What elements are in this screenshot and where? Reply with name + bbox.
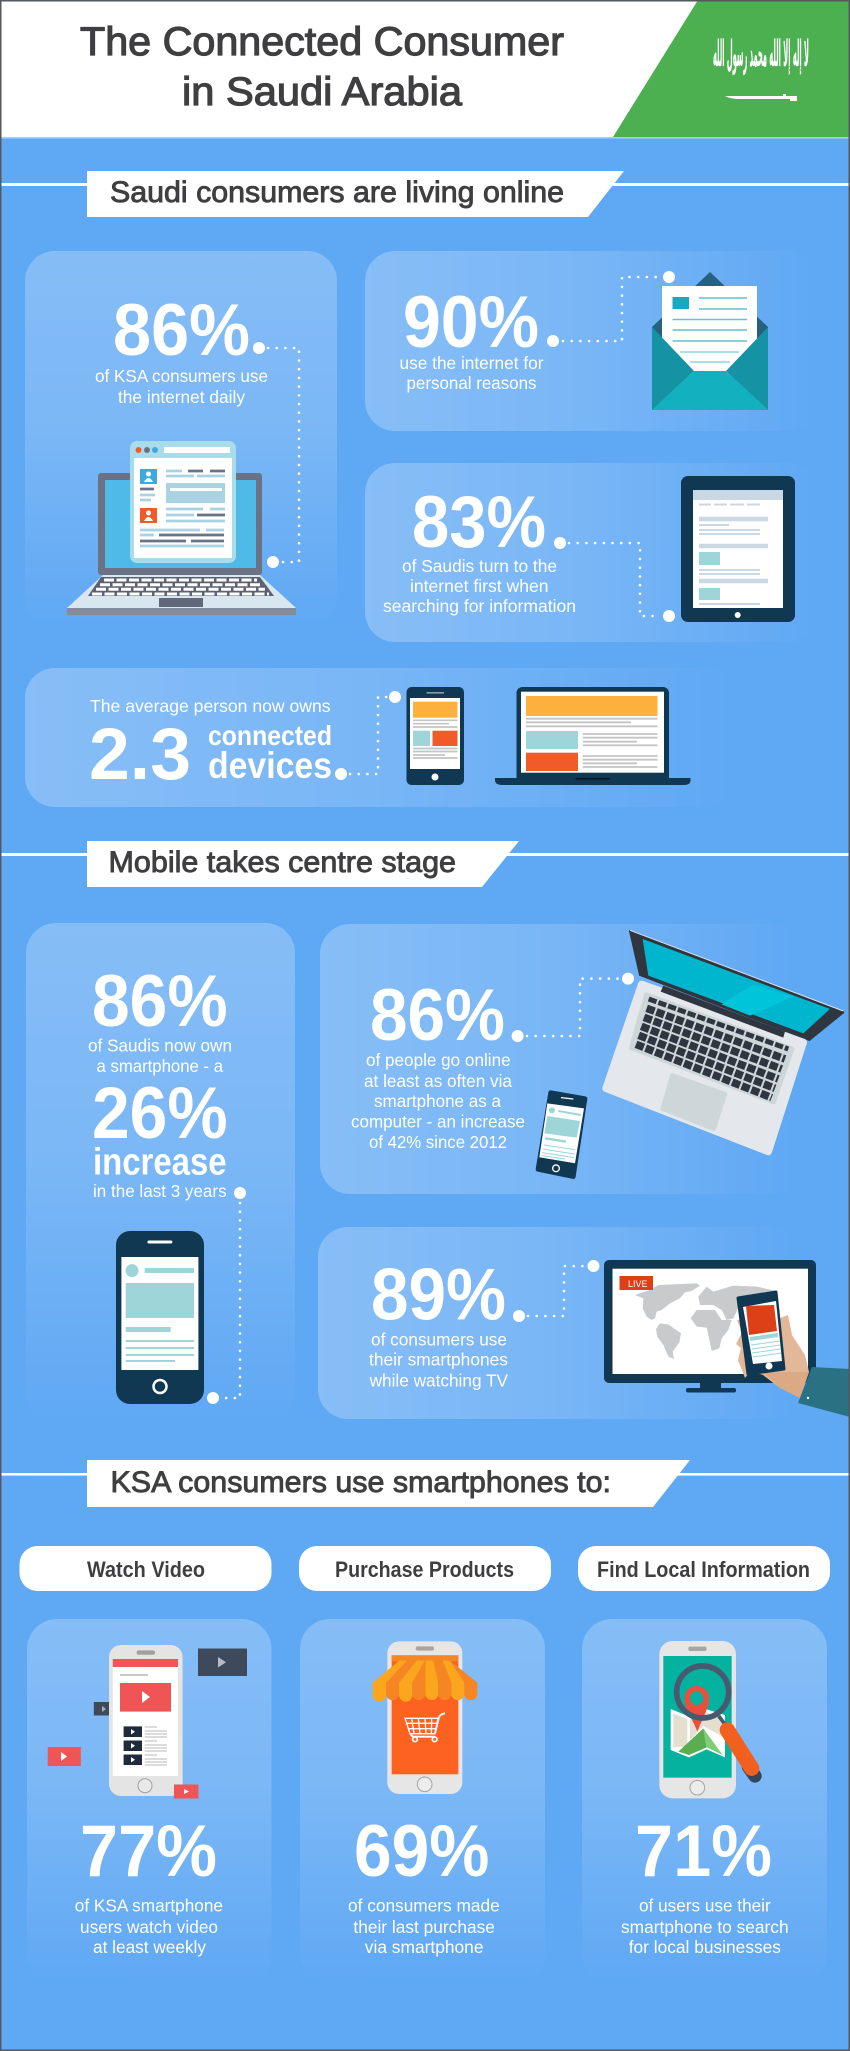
- connector: [207, 1187, 246, 1404]
- caption: for local businesses: [629, 1937, 781, 1957]
- caption: users watch video: [80, 1917, 218, 1937]
- increase label: increase: [93, 1142, 227, 1184]
- stat 89%: 89%: [371, 1255, 506, 1336]
- pill: Find Local Information: Find Local Information: [597, 1557, 810, 1582]
- stat 86%: 86%: [370, 975, 505, 1056]
- caption: of Saudis now own: [88, 1036, 232, 1056]
- stat caption: [95, 366, 268, 407]
- icon: envelope: [652, 272, 768, 410]
- panel: smartphone ownership: [26, 923, 295, 1426]
- icon: TV with world map: [604, 1260, 816, 1392]
- caption: of consumers use: [371, 1330, 507, 1350]
- pill: Watch Video: [20, 1546, 272, 1591]
- caption: [88, 1036, 232, 1076]
- caption: while watching TV: [369, 1370, 508, 1390]
- stat 26%: 26%: [92, 1073, 228, 1154]
- icon: phone playing video: [48, 1645, 247, 1798]
- caption: their smartphones: [369, 1350, 508, 1370]
- section heading ribbon: Mobile takes centre stage: [108, 846, 456, 879]
- section 1: Saudi consumers are living online: [0, 171, 850, 807]
- connector: [513, 1260, 600, 1322]
- icon: smartphone: [116, 1231, 204, 1404]
- stat caption: internet first when: [410, 576, 548, 596]
- caption: [621, 1896, 789, 1957]
- stat 83%: 83%: [412, 482, 546, 563]
- caption: smartphone to search: [621, 1917, 789, 1937]
- section heading ribbon: [87, 1460, 690, 1507]
- stat caption: use the internet for: [400, 353, 544, 373]
- section 2: Mobile takes centre stage: [0, 841, 850, 1426]
- panel: 90% personal reasons: [365, 251, 820, 431]
- panel: find local information: [582, 1619, 827, 1985]
- header banner: [0, 0, 850, 138]
- stat caption: of Saudis turn to the: [402, 556, 557, 576]
- caption: smartphone as a: [374, 1091, 501, 1111]
- icon: phone with shop awning: [373, 1641, 477, 1794]
- caption: of people go online: [366, 1050, 511, 1070]
- icon: open laptop: [606, 930, 843, 1152]
- caption: [348, 1896, 500, 1957]
- icon: tablet: [681, 476, 795, 622]
- connector: [554, 537, 675, 622]
- caption: [351, 1050, 525, 1152]
- caption: of KSA smartphone: [75, 1896, 223, 1916]
- panel: watch video: [27, 1619, 272, 1985]
- connector: [335, 691, 401, 780]
- caption: computer - an increase: [351, 1112, 525, 1132]
- pill: Find Local Information: [578, 1546, 830, 1591]
- panel: 2.3 connected devices: [25, 668, 740, 807]
- connector: [512, 973, 634, 1042]
- connector: [547, 271, 675, 347]
- section heading ribbon: Saudi consumers are living online: [110, 176, 564, 209]
- stat 77%: 77%: [80, 1811, 217, 1892]
- title: The Connected Consumer: [80, 20, 564, 64]
- caption: their last purchase: [353, 1917, 495, 1937]
- caption: at least weekly: [93, 1937, 206, 1957]
- section heading ribbon: KSA consumers use smartphones to:: [110, 1466, 611, 1499]
- flag of Saudi Arabia: [613, 0, 850, 137]
- icon: hand holding phone: [736, 1292, 850, 1417]
- caption: of 42% since 2012: [369, 1132, 507, 1152]
- panel: 86% go online via smartphone: [320, 924, 843, 1194]
- caption: in the last 3 years: [93, 1181, 227, 1201]
- pill: Watch Video: Watch Video: [87, 1557, 205, 1582]
- icon: phone: [406, 687, 464, 785]
- panel: 86% use internet daily: [25, 251, 337, 629]
- caption: [369, 1330, 508, 1390]
- LIVE badge: LIVE: [628, 1279, 648, 1289]
- stat caption: the internet daily: [118, 387, 245, 407]
- caption: of users use their: [639, 1896, 771, 1916]
- title: [80, 20, 564, 114]
- caption: of consumers made: [348, 1896, 500, 1916]
- stat 86%: 86%: [92, 961, 228, 1042]
- stat caption: personal reasons: [406, 373, 537, 393]
- title: in Saudi Arabia: [182, 70, 463, 114]
- caption: at least as often via: [364, 1071, 512, 1091]
- stat 86%: 86%: [113, 290, 250, 371]
- stat 69%: 69%: [354, 1811, 489, 1892]
- panel: 83% turn to internet first: [365, 463, 820, 642]
- icon: laptop: [495, 687, 690, 785]
- pill: Purchase Products: [299, 1546, 551, 1591]
- caption: a smartphone - a: [96, 1056, 223, 1076]
- panel: 89% while watching TV: [318, 1227, 850, 1419]
- section heading ribbon: [87, 171, 624, 217]
- stat caption: searching for information: [383, 596, 576, 616]
- connector: [253, 342, 299, 568]
- caption: via smartphone: [365, 1937, 484, 1957]
- connected devices label: devices: [208, 745, 332, 786]
- stat 2.3: 2.3: [89, 714, 191, 795]
- intro text: The average person now owns: [90, 696, 331, 716]
- stat 90%: 90%: [403, 282, 539, 363]
- LIVE badge: [620, 1276, 653, 1290]
- stat caption: of KSA consumers use: [95, 366, 268, 386]
- pill: Purchase Products: Purchase Products: [335, 1557, 514, 1582]
- stat caption: [400, 353, 544, 393]
- connected devices label: [208, 720, 332, 786]
- stat caption: [383, 556, 576, 616]
- section 3: KSA consumers use smartphones to: [0, 1460, 850, 1985]
- icon: laptop with browser: [67, 441, 296, 615]
- connected devices label: connected: [208, 720, 332, 751]
- stat 71%: 71%: [635, 1811, 772, 1892]
- icon: phone with map and magnifier: [659, 1641, 755, 1798]
- caption: [75, 1896, 223, 1957]
- icon: phone: [538, 1093, 585, 1177]
- panel: purchase products: [300, 1619, 545, 1985]
- section heading ribbon: [87, 841, 519, 887]
